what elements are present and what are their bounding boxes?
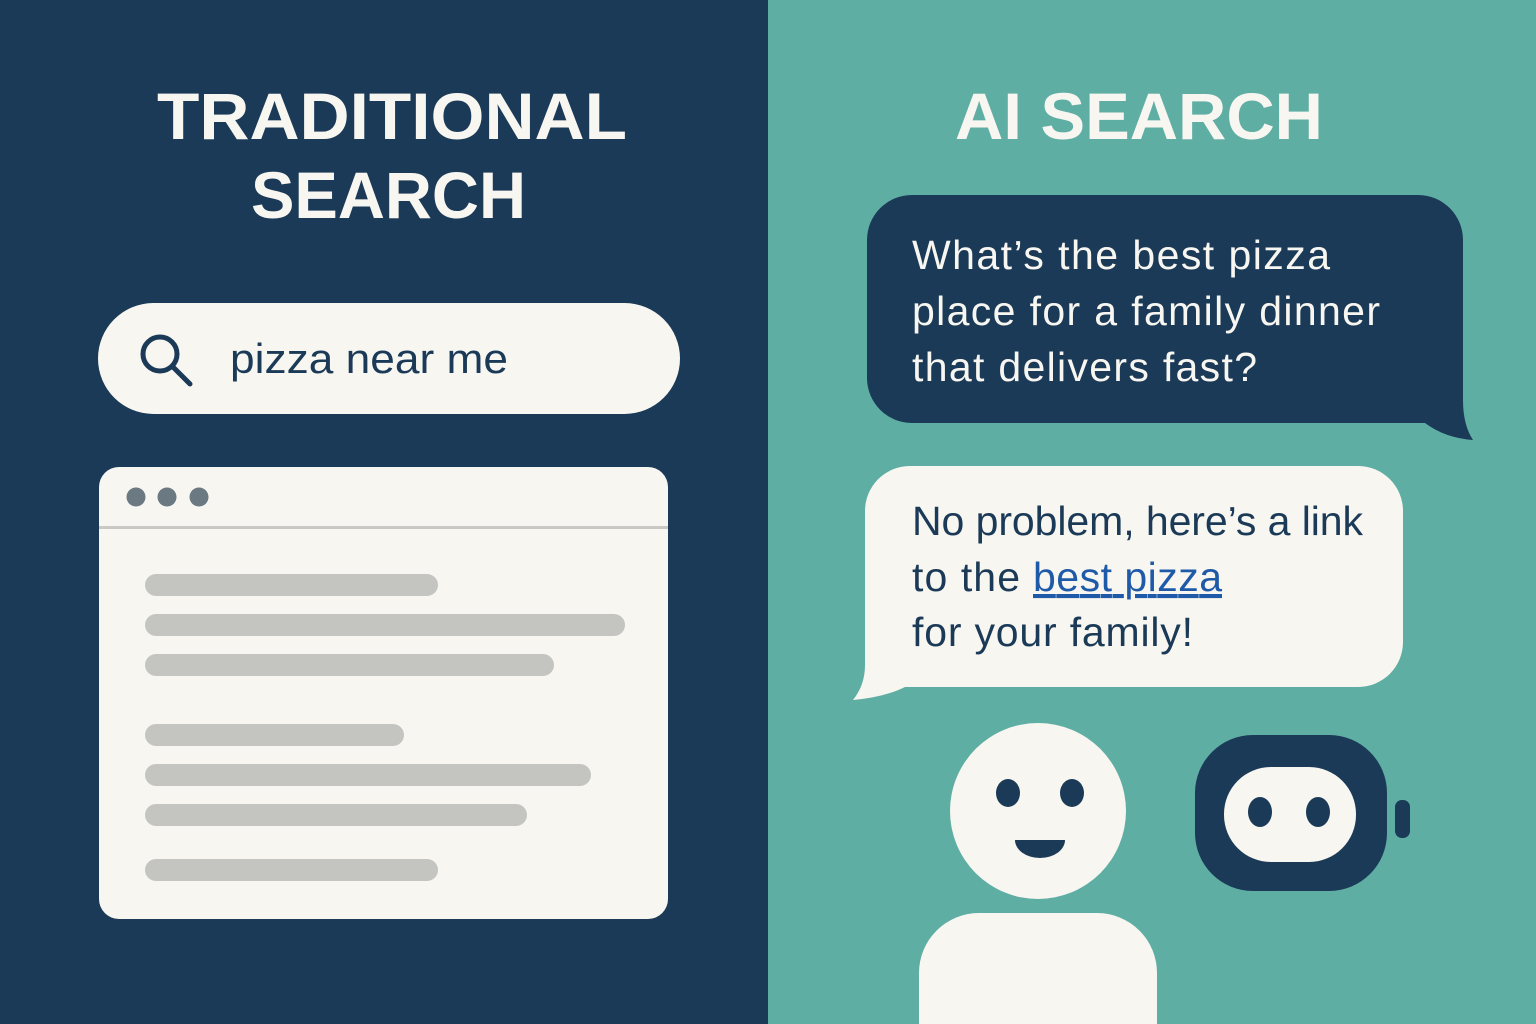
search query text: pizza near me <box>230 335 508 382</box>
ai answer bubble: for your family! <box>912 609 1193 655</box>
icon: magnifier <box>143 337 190 384</box>
ai answer bubble: to the <box>912 554 1020 600</box>
ai answer bubble: No problem, here’s a link <box>912 498 1364 544</box>
ai answer bubble <box>853 466 1403 700</box>
title: traditional search: SEARCH <box>251 158 526 232</box>
icon: robot <box>1195 735 1410 891</box>
ai answer bubble: best pizza <box>1033 554 1222 600</box>
user question bubble: place for a family dinner <box>912 288 1380 334</box>
title: ai search: AI SEARCH <box>955 79 1323 153</box>
user question bubble <box>867 195 1473 440</box>
panel: ai search <box>768 0 1536 1024</box>
title: traditional search: TRADITIONAL <box>157 79 627 153</box>
browser window: results <box>99 467 668 919</box>
result lines <box>145 574 625 881</box>
title: traditional search <box>157 79 627 232</box>
user question bubble: What’s the best pizza <box>912 232 1330 278</box>
user question bubble: that delivers fast? <box>912 344 1257 390</box>
window dots <box>126 488 208 506</box>
search bar <box>98 303 680 414</box>
icon: person <box>919 723 1157 1024</box>
panel: traditional search <box>0 0 768 1024</box>
